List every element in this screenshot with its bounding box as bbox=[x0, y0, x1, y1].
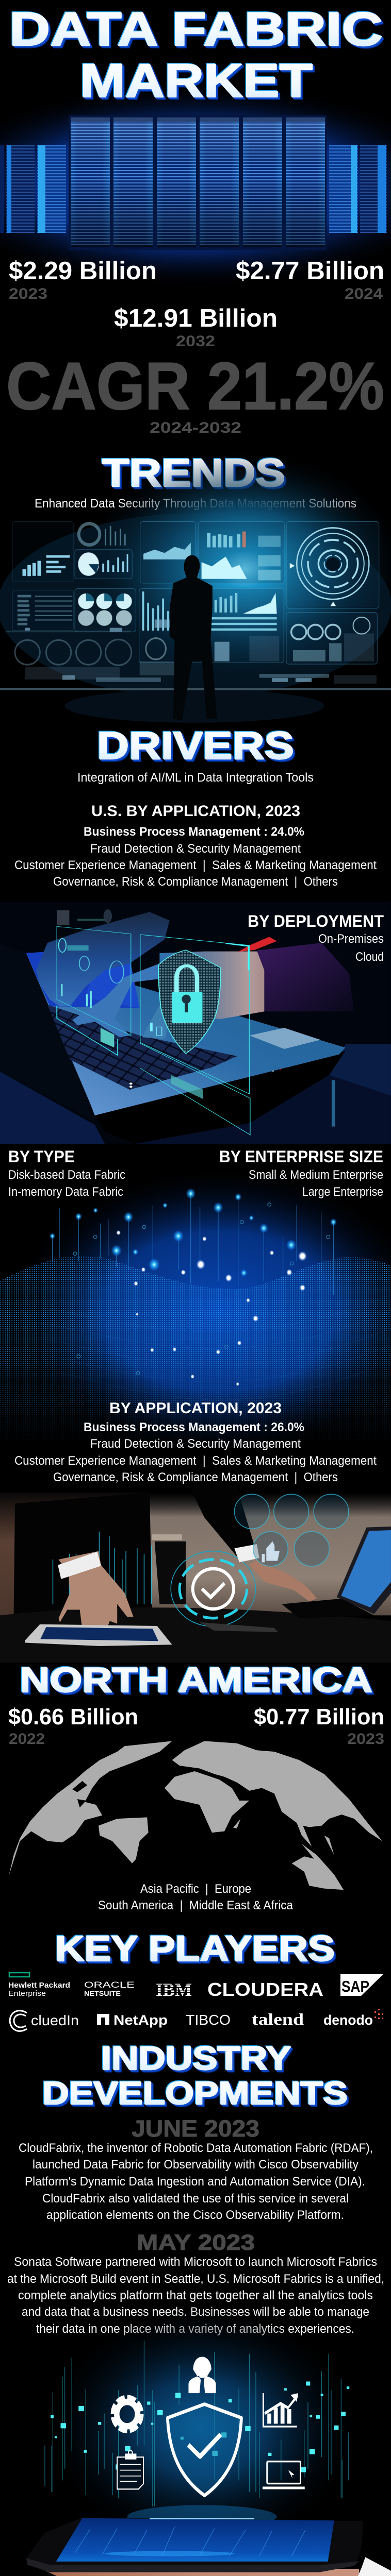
icon: person bbox=[188, 2357, 216, 2393]
heading: North America: NORTH AMERICA bbox=[20, 1660, 372, 1700]
logo: Oracle NetSuite bbox=[84, 1980, 135, 1997]
heading: Industry Developments: DEVELOPMENTS bbox=[42, 2076, 348, 2111]
stat: 2024 market size: $2.77 Billion bbox=[236, 257, 384, 285]
text: trends description: Enhanced Data Security Through Data Management Solutions bbox=[35, 497, 356, 511]
text block: by application: Customer Experience Management | Sales & Marketing Management bbox=[14, 1454, 377, 1468]
icon: laptop bbox=[263, 2462, 305, 2488]
icon circles bbox=[234, 1494, 349, 1566]
curved data lines bbox=[30, 1295, 391, 1400]
dashboard panels bbox=[12, 522, 379, 664]
title: Data Fabric Market: DATA FABRIC bbox=[9, 3, 383, 56]
heading: Industry Developments bbox=[42, 2040, 348, 2111]
image: business office with tablet bbox=[0, 1487, 391, 1663]
image: businessman viewing dashboards bbox=[0, 452, 391, 723]
text block: by deployment: BY DEPLOYMENT bbox=[248, 912, 384, 930]
logo: denodo bbox=[323, 2009, 383, 2028]
text block: by type: BY TYPE bbox=[8, 1147, 75, 1166]
pies bbox=[78, 594, 132, 626]
heading: Industry Developments: INDUSTRY bbox=[101, 2040, 291, 2077]
heading: Key Players: KEY PLAYERS bbox=[55, 1928, 335, 1969]
data streams bbox=[45, 2341, 349, 2506]
stat: North America 2022 bbox=[8, 1704, 138, 1748]
gauges bbox=[15, 638, 166, 665]
text block: U.S. by application: U.S. BY APPLICATION, 2023 bbox=[91, 803, 300, 820]
person silhouette bbox=[170, 555, 217, 721]
logo: Oracle NetSuite: ORACLE bbox=[84, 1980, 135, 1990]
logo: Hewlett Packard Enterprise: Enterprise bbox=[8, 1989, 46, 1998]
city lights bbox=[6, 619, 377, 684]
laptop deck bbox=[26, 953, 346, 1115]
text block: by deployment bbox=[248, 912, 384, 964]
text block: by deployment: On-Premises bbox=[318, 932, 384, 946]
icon: shield with check bbox=[168, 2404, 241, 2496]
laptop bbox=[337, 1527, 391, 1614]
development: June 2023: launched Data Fabric for Observability with Cisco Observability bbox=[32, 2158, 359, 2172]
cyan data squares bbox=[51, 2382, 349, 2472]
development: June 2023: JUNE 2023 bbox=[132, 2115, 259, 2142]
image: server room bbox=[0, 82, 391, 289]
text block: other regions bbox=[98, 1882, 294, 1912]
stat: 2032 market size bbox=[114, 304, 278, 350]
logo: SAP bbox=[340, 1974, 383, 1996]
stat: CAGR: 2024-2032 bbox=[150, 419, 241, 436]
development: May 2023: Sonata Software partnered with Microsoft to launch Microsoft Fabrics bbox=[14, 2255, 377, 2269]
hand on tablet bbox=[59, 1551, 134, 1635]
stat: 2024 market size bbox=[236, 257, 384, 302]
data tag bbox=[101, 1028, 114, 1047]
logo: Hewlett Packard Enterprise bbox=[8, 1973, 70, 1998]
logos: key players bbox=[8, 1973, 383, 2031]
stat: 2023 market size: $2.29 Billion bbox=[9, 257, 157, 285]
stat: North America 2023: 2023 bbox=[347, 1731, 384, 1748]
hands bbox=[36, 912, 170, 1006]
stat: 2024 market size: 2024 bbox=[345, 285, 383, 302]
stat: 2023 market size bbox=[9, 257, 157, 302]
heading: Drivers: DRIVERS bbox=[97, 724, 294, 767]
text block: by application: Business Process Management : 26.0% bbox=[84, 1420, 304, 1434]
logo: talend: talend bbox=[252, 2010, 304, 2028]
development: June 2023: CloudFabrix also validated the use of this service in several bbox=[42, 2192, 349, 2206]
logo: CluedIn bbox=[10, 2011, 79, 2031]
image: security icons over tablet bbox=[26, 2306, 391, 2576]
icon: growth chart bbox=[263, 2393, 298, 2428]
text block: U.S. by application: Business Process Management : 24.0% bbox=[84, 825, 304, 839]
text: drivers description: Integration of AI/ML in Data Integration Tools bbox=[77, 771, 314, 785]
image: world map bbox=[9, 1741, 382, 1890]
glowing nodes bbox=[50, 1188, 337, 1386]
icon: clipboard bbox=[117, 2450, 143, 2489]
stat: North America 2022: 2022 bbox=[9, 1731, 45, 1748]
text block: U.S. by application bbox=[14, 803, 377, 889]
stat: North America 2023: $0.77 Billion bbox=[254, 1704, 384, 1730]
data bars hologram bbox=[53, 1532, 151, 1610]
stat: 2023 market size: 2023 bbox=[9, 285, 47, 302]
logo: NetApp: NetApp bbox=[113, 2012, 168, 2028]
development: May 2023: complete analytics platform that gets together all the analytics tools bbox=[18, 2289, 373, 2302]
development: June 2023: Platform's Dynamic Data Ingestion and Automation Service (DIA). bbox=[25, 2175, 365, 2189]
text block: by enterprise size: BY ENTERPRISE SIZE bbox=[219, 1147, 383, 1166]
HUD frames bbox=[57, 926, 250, 1135]
text block: other regions: South America | Middle East & Africa bbox=[98, 1899, 294, 1912]
development: June 2023: CloudFabrix, the inventor of Robotic Data Automation Fabric (RDAF), bbox=[19, 2141, 373, 2155]
text block: U.S. by application: Customer Experience Management | Sales & Marketing Management bbox=[14, 858, 377, 872]
title: Data Fabric Market bbox=[9, 3, 383, 107]
text block: by type: Disk-based Data Fabric bbox=[8, 1168, 125, 1182]
text block: by application: Governance, Risk & Compliance Management | Others bbox=[53, 1470, 338, 1484]
development: June 2023 bbox=[19, 2115, 373, 2222]
heading: Trends: TRENDS bbox=[102, 451, 285, 495]
logo: CluedIn: cluedIn bbox=[31, 2012, 79, 2028]
development: May 2023: and data that a business needs. Businesses will be able to manage bbox=[22, 2305, 369, 2319]
development: May 2023: their data in one place with a variety of analytics experiences. bbox=[36, 2322, 354, 2336]
logo: denodo: denodo bbox=[323, 2012, 373, 2028]
text block: U.S. by application: Fraud Detection & Security Management bbox=[90, 842, 301, 856]
stat: 2032 market size: 2032 bbox=[176, 333, 215, 350]
text block: by application bbox=[14, 1400, 377, 1484]
icon: gear bbox=[115, 2399, 140, 2429]
title: Data Fabric Market: MARKET bbox=[80, 55, 313, 107]
text block: other regions: Asia Pacific | Europe bbox=[140, 1882, 251, 1896]
shirt cuff bbox=[339, 2557, 391, 2576]
logo: IBM: IBM bbox=[156, 1979, 192, 2000]
radar circle bbox=[297, 528, 369, 599]
keyboard bbox=[47, 1005, 237, 1090]
image: laptop security bbox=[0, 902, 391, 1144]
logo: SAP: SAP bbox=[341, 1977, 369, 1995]
logo: Oracle NetSuite: NETSUITE bbox=[84, 1989, 121, 1997]
area charts bbox=[143, 543, 191, 560]
logo: Hewlett Packard Enterprise: Hewlett Packard bbox=[8, 1981, 70, 1990]
image: data network bbox=[0, 1166, 391, 1456]
text block: by enterprise size bbox=[219, 1147, 383, 1199]
development: May 2023: MAY 2023 bbox=[137, 2230, 255, 2255]
shield and lock bbox=[158, 950, 221, 1054]
text block: by application: BY APPLICATION, 2023 bbox=[109, 1400, 282, 1417]
text block: U.S. by application: Governance, Risk & Compliance Management | Others bbox=[53, 875, 338, 889]
text block: by type: In-memory Data Fabric bbox=[8, 1185, 123, 1199]
stat: North America 2023 bbox=[254, 1704, 384, 1748]
text block: by deployment: Cloud bbox=[355, 950, 384, 964]
stat: 2032 market size: $12.91 Billion bbox=[114, 304, 278, 332]
hand holding tablet bbox=[41, 2569, 359, 2576]
development: June 2023: application elements on the Cisco Observability Platform. bbox=[46, 2208, 344, 2222]
signal lines bbox=[53, 1194, 333, 1295]
text block: by application: Fraud Detection & Security Management bbox=[90, 1437, 301, 1451]
left charts bbox=[23, 526, 128, 576]
development: May 2023 bbox=[7, 2230, 384, 2336]
table text bbox=[18, 595, 72, 625]
stat: North America 2022: $0.66 Billion bbox=[8, 1704, 138, 1730]
logo: Cloudera: CLOUDERA bbox=[207, 1979, 323, 2000]
sales promotion widget bbox=[291, 617, 370, 639]
check badge bbox=[171, 1551, 255, 1626]
logo: TIBCO: TIBCO bbox=[186, 2012, 231, 2028]
text block: by type bbox=[8, 1147, 125, 1199]
tablet bbox=[26, 2518, 363, 2571]
